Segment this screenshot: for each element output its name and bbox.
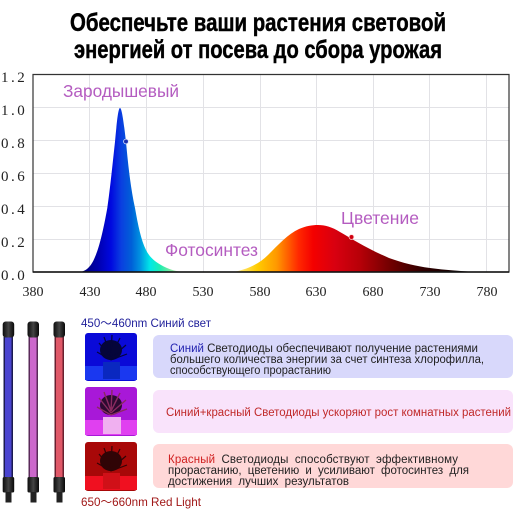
panel: blue light	[153, 335, 513, 378]
x axis labels: 680	[362, 285, 384, 300]
panel text: blue light: большего количества энергии за счет синтеза хлорофилла,	[170, 354, 484, 366]
x axis labels: 380	[22, 285, 44, 300]
lamp: purple	[28, 322, 39, 502]
x axis labels: 480	[136, 285, 156, 300]
marker: red dot	[349, 235, 354, 239]
y axis labels: 0.6	[1, 169, 27, 185]
x axis labels: 780	[476, 285, 498, 300]
x axis labels: 430	[80, 285, 100, 300]
panel: blue and red light	[153, 390, 513, 433]
y axis labels: 0.2	[1, 235, 27, 251]
panel text: blue light	[170, 343, 484, 377]
y axis labels	[1, 70, 27, 284]
lamp: red	[54, 322, 65, 502]
x axis labels	[22, 285, 498, 300]
marker: blue dot	[124, 139, 128, 144]
panel text: red light: Красный Светодиоды способствуют эффективному	[168, 454, 458, 466]
photo: purple plant	[85, 387, 137, 436]
label: flowering: Цветение	[341, 208, 419, 228]
panel text: blue light: способствующего прорастанию	[170, 365, 331, 377]
blue spectrum peak	[80, 108, 183, 272]
photo: red plant	[85, 442, 137, 491]
panel text: blue and red light: Синий+красный Светодиоды ускоряют рост комнатных растений	[166, 407, 511, 419]
chart frame	[33, 74, 509, 272]
x axis labels: 730	[420, 285, 440, 300]
panel: red light	[153, 444, 513, 488]
y axis labels: 1.2	[1, 70, 27, 86]
lamp: blue	[3, 322, 14, 502]
y axis labels: 0.0	[1, 268, 27, 284]
panel text: red light	[168, 454, 469, 488]
y axis labels: 0.8	[1, 136, 27, 152]
label: photosynthesis: Фотосинтез	[165, 240, 258, 260]
red spectrum hump	[233, 225, 476, 272]
x axis labels: 580	[250, 285, 270, 300]
y axis labels: 1.0	[1, 103, 27, 119]
panel text: red light: достижения лучших результатов	[168, 476, 349, 488]
x axis labels: 530	[192, 285, 214, 300]
y axis labels: 0.4	[1, 202, 27, 218]
wavelength label: red: 650～660nm Red Light	[81, 495, 202, 509]
photo: blue plant	[85, 333, 137, 381]
panel text: red light: прорастанию, цветению и усиливают фотосинтез для	[168, 465, 469, 477]
x axis labels: 630	[306, 285, 326, 300]
panel text: blue light: Синий Светодиоды обеспечивают получение растениями	[170, 343, 478, 355]
label: germination: Зародышевый	[63, 81, 179, 101]
spectrum chart	[1, 70, 509, 300]
title	[70, 9, 446, 64]
wavelength label: blue: 450～460nm Синий свет	[81, 318, 212, 330]
